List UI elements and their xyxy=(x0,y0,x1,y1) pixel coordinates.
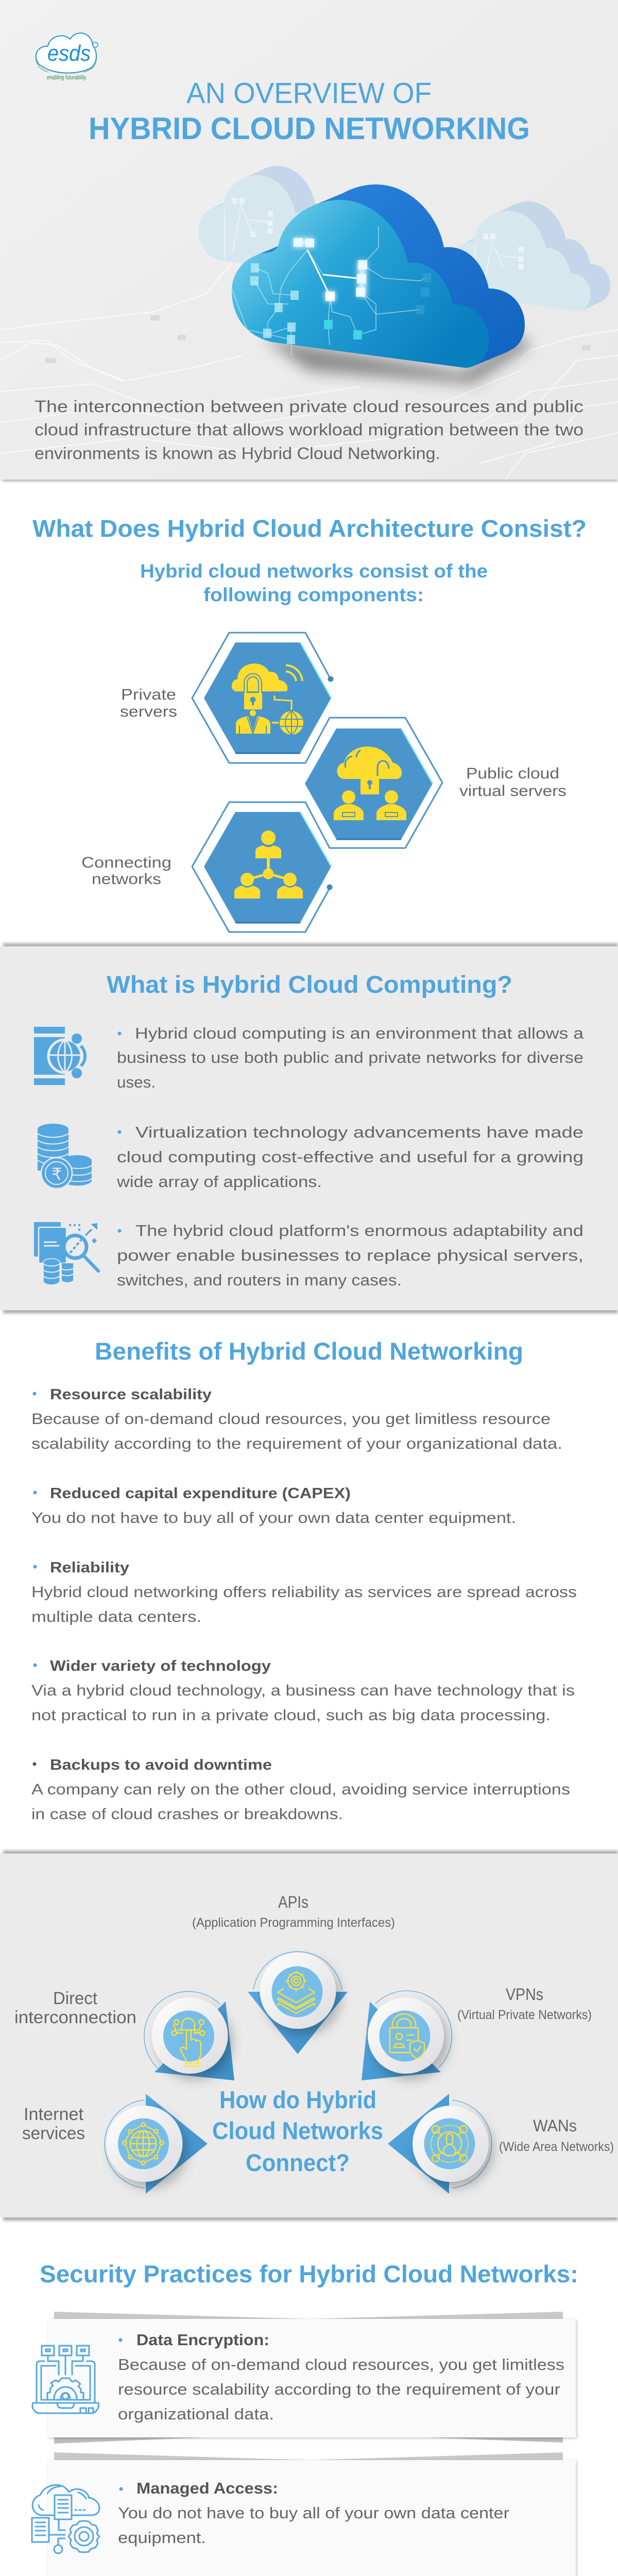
icon: globe device xyxy=(34,1027,85,1085)
label: private servers: Private xyxy=(121,686,176,703)
node: WANs xyxy=(388,2094,614,2194)
node: APIs xyxy=(192,1893,395,2054)
benefit: wider variety: not practical to run in a private cloud, such as big data processing. xyxy=(31,1707,551,1724)
icon: rupee coins: ₹ xyxy=(52,1164,62,1184)
logo: esds xyxy=(47,41,91,66)
logo: enabling futurability. xyxy=(47,75,87,81)
hero shadow xyxy=(2,475,618,481)
computing text 2: wide array of applications. xyxy=(116,1173,322,1191)
subheading: Hybrid cloud networks consist of the xyxy=(140,561,488,582)
node: VPNs xyxy=(362,1985,592,2080)
panel: how do hybrid cloud networks connect xyxy=(0,1851,618,2221)
computing text 2 xyxy=(116,1123,583,1191)
center text xyxy=(212,2086,383,2176)
benefit: resource scalability: scalability according to the requirement of your organizational data. xyxy=(31,1435,562,1452)
hexagon outline xyxy=(192,633,442,932)
panel shadows xyxy=(3,1851,618,2221)
title: HYBRID CLOUD NETWORKING xyxy=(89,111,530,146)
card: data encryption xyxy=(32,2312,576,2444)
hero background xyxy=(0,0,618,480)
panel: what is hybrid cloud computing xyxy=(0,943,618,1313)
data encryption text: organizational data. xyxy=(118,2405,274,2423)
label: VPNs xyxy=(457,1985,592,2022)
icon: documents and magnifier xyxy=(34,1222,98,1285)
data encryption text: Data Encryption: xyxy=(136,2331,269,2349)
benefit: backups: Backups to avoid downtime xyxy=(50,1757,272,1773)
icon: cloud lock xyxy=(232,664,303,735)
panel: benefits xyxy=(31,1337,577,1823)
right ghost cloud xyxy=(449,201,610,312)
circuit board pattern xyxy=(0,263,618,480)
icon: wan person xyxy=(431,2125,468,2162)
main cloud circuit xyxy=(232,227,426,355)
panel: hero xyxy=(0,0,618,481)
label: connecting networks xyxy=(81,854,171,888)
label: internet services xyxy=(22,2105,85,2143)
benefit: wider variety: Via a hybrid cloud technology, a business can have technology that is xyxy=(31,1682,575,1699)
heading: security: Security Practices for Hybrid Cloud Networks: xyxy=(40,2260,578,2287)
icon: network of people xyxy=(234,831,303,899)
label: internet services: services xyxy=(22,2124,85,2143)
main cloud extrusion xyxy=(236,184,525,366)
subheading xyxy=(140,561,488,605)
heading: benefits: Benefits of Hybrid Cloud Networking xyxy=(95,1337,523,1365)
computing text 2: Virtualization technology advancements have made xyxy=(135,1123,583,1141)
label: public cloud: virtual servers xyxy=(459,783,566,800)
label: public cloud xyxy=(459,765,566,800)
card: managed access xyxy=(32,2452,576,2576)
label: VPNs: VPNs xyxy=(506,1985,543,2004)
computing text 1 xyxy=(117,1024,584,1091)
main cloud front xyxy=(232,200,489,368)
panel shadows xyxy=(3,943,618,1313)
center text: Connect? xyxy=(246,2149,350,2176)
managed access text xyxy=(118,2479,509,2547)
label: APIs: APIs xyxy=(278,1893,308,1911)
center text: Cloud Networks xyxy=(212,2117,383,2144)
label: connecting networks: Connecting xyxy=(81,854,171,871)
node: internet services xyxy=(22,2094,208,2194)
benefit: backups: in case of cloud crashes or breakdowns. xyxy=(31,1806,343,1823)
label: direct interconnection xyxy=(14,1989,136,2027)
benefit: reduced capex: You do not have to buy all of your own data center equipment. xyxy=(31,1510,516,1527)
data encryption text: Because of on-demand cloud resources, you get limitless xyxy=(118,2355,564,2374)
label: VPNs: (Virtual Private Networks) xyxy=(457,2008,592,2022)
label: APIs xyxy=(192,1893,395,1930)
benefit: wider variety xyxy=(31,1658,575,1724)
computing text 2: cloud computing cost-effective and useful for a growing xyxy=(117,1148,583,1166)
heading: architecture: What Does Hybrid Cloud Architecture Consist? xyxy=(32,515,587,542)
label: APIs: (Application Programming Interfaces) xyxy=(192,1916,395,1930)
heading: computing: What is Hybrid Cloud Computing? xyxy=(107,971,512,998)
label: private servers xyxy=(120,686,177,720)
computing text 3 xyxy=(117,1222,583,1289)
intro paragraph: environments is known as Hybrid Cloud Networking. xyxy=(35,444,440,463)
data encryption text: resource scalability according to the requirement of your xyxy=(118,2380,560,2398)
hexagon: connecting networks xyxy=(204,812,331,923)
icon: rupee coins xyxy=(38,1124,92,1189)
label: WANs: WANs xyxy=(533,2116,577,2135)
cloud ground shadow xyxy=(263,335,530,384)
managed access text: Managed Access: xyxy=(136,2479,278,2497)
panel background xyxy=(0,1854,618,2217)
icon: gear and layers xyxy=(278,1971,315,2013)
icon: cloud users xyxy=(334,747,406,820)
center text: How do Hybrid xyxy=(219,2086,376,2113)
icon: lock id shield xyxy=(390,2014,424,2059)
icon: laptop gear xyxy=(32,2346,99,2413)
benefit: resource scalability: Because of on-demand cloud resources, you get limitless resource xyxy=(31,1411,551,1428)
hexagon: private servers xyxy=(204,642,331,753)
title: AN OVERVIEW OF xyxy=(186,77,432,110)
benefit: reliability: Hybrid cloud networking offers reliability as services are spread across xyxy=(31,1584,577,1601)
benefit: backups: A company can rely on the other cloud, avoiding service interruptions xyxy=(31,1781,570,1798)
computing text 1: Hybrid cloud computing is an environment that allows a xyxy=(135,1024,584,1042)
left ghost cloud xyxy=(198,166,359,276)
benefit: reduced capex xyxy=(31,1485,516,1527)
label: private servers: servers xyxy=(120,703,177,720)
label: WANs xyxy=(499,2116,614,2154)
computing text 3: The hybrid cloud platform's enormous adaptability and xyxy=(135,1222,583,1240)
logo xyxy=(36,33,98,81)
intro paragraph xyxy=(35,397,583,463)
benefit: resource scalability xyxy=(31,1386,562,1452)
computing text 1: business to use both public and private networks for diverse xyxy=(117,1048,583,1066)
node: direct interconnection xyxy=(14,1989,234,2080)
intro paragraph: cloud infrastructure that allows workload migration between the two xyxy=(35,420,583,439)
illustration: clouds xyxy=(198,166,610,384)
benefit: reliability: multiple data centers. xyxy=(31,1608,201,1625)
subheading: following components: xyxy=(203,584,424,605)
benefit: reduced capex: Reduced capital expenditure (CAPEX) xyxy=(50,1485,351,1502)
label: direct interconnection: interconnection xyxy=(14,2008,136,2027)
benefit: reliability: Reliability xyxy=(50,1560,129,1576)
icon: touch network xyxy=(172,2019,205,2066)
computing text 3: switches, and routers in many cases. xyxy=(117,1271,402,1289)
benefit: resource scalability: Resource scalability xyxy=(50,1386,212,1403)
managed access text: equipment. xyxy=(118,2529,206,2547)
managed access text: You do not have to buy all of your own data center xyxy=(118,2504,509,2522)
benefit: backups xyxy=(31,1757,570,1823)
panel background xyxy=(0,946,618,1310)
title xyxy=(89,77,530,146)
panel: security practices xyxy=(32,2260,578,2576)
label: internet services: Internet xyxy=(24,2105,84,2124)
intro paragraph: The interconnection between private cloud resources and public xyxy=(35,397,583,416)
icon: globe network xyxy=(123,2123,164,2165)
label: connecting networks: networks xyxy=(92,871,161,888)
label: public cloud: Public cloud xyxy=(466,765,559,782)
data encryption text xyxy=(118,2331,564,2423)
computing text 1: uses. xyxy=(117,1073,156,1091)
benefit: wider variety: Wider variety of technology xyxy=(50,1658,271,1674)
panel: architecture xyxy=(32,515,587,932)
label: direct interconnection: Direct xyxy=(53,1989,98,2008)
benefit: reliability xyxy=(31,1560,577,1625)
computing text 3: power enable businesses to replace physical servers, xyxy=(117,1246,583,1264)
hexagon: public cloud xyxy=(305,728,433,839)
icon: cloud docs gear xyxy=(32,2485,99,2553)
